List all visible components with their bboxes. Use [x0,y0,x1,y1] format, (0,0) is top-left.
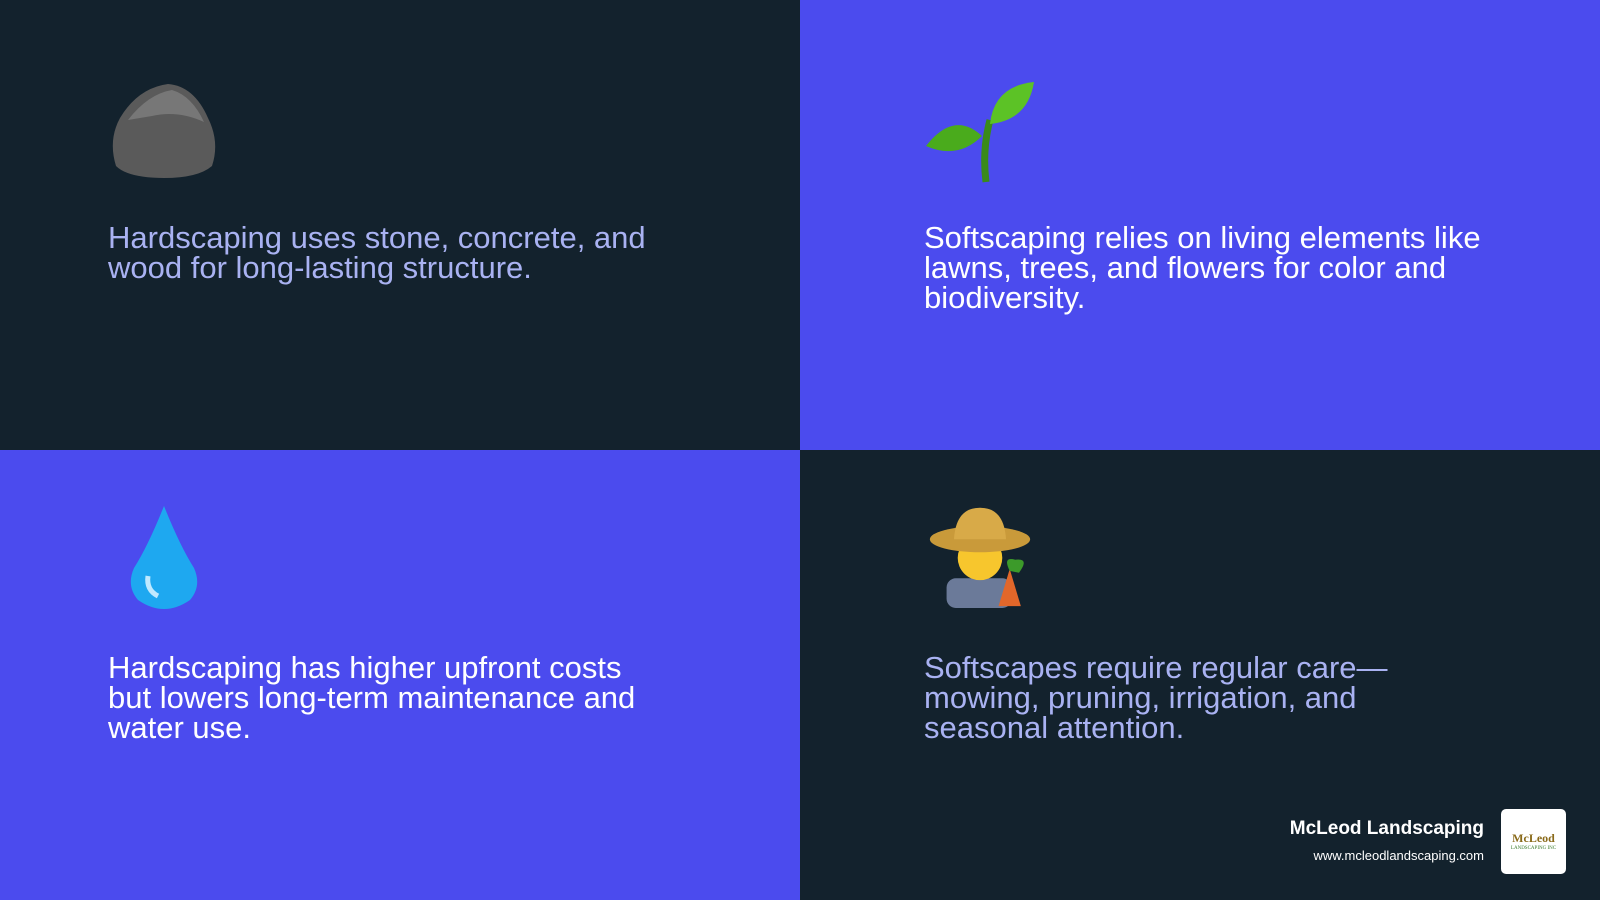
icon: rock [112,84,216,178]
text block: Hardscaping uses stone, concrete, and wood for long-lasting structure. [108,220,646,285]
logo: LANDSCAPING INC [1511,846,1556,851]
text block [924,650,1388,745]
text block: Hardscaping has higher upfront costs but lowers long-term maintenance and water use. [108,650,635,745]
text block: Softscapes require regular care— [924,650,1388,685]
icon: farmer [930,508,1030,608]
logo [1501,809,1566,874]
panel: softscaping elements [800,0,1600,450]
panel: hardscaping materials [0,0,800,450]
brand: company name and url: www.mcleodlandscaping.com [1313,848,1484,863]
text block: Softscaping relies on living elements like lawns, trees, and flowers for color and biodiversity. [924,220,1481,315]
panel: hardscaping costs [0,450,800,900]
brand: company name and url: McLeod Landscaping [1290,818,1484,839]
text block: mowing, pruning, irrigation, and seasonal attention. [924,680,1357,745]
brand: company name and url [1290,818,1484,863]
logo: McLeod [1512,831,1555,845]
icon: water drop [130,506,198,609]
icon: sprout [926,82,1034,182]
panel: softscape care [800,450,1600,900]
